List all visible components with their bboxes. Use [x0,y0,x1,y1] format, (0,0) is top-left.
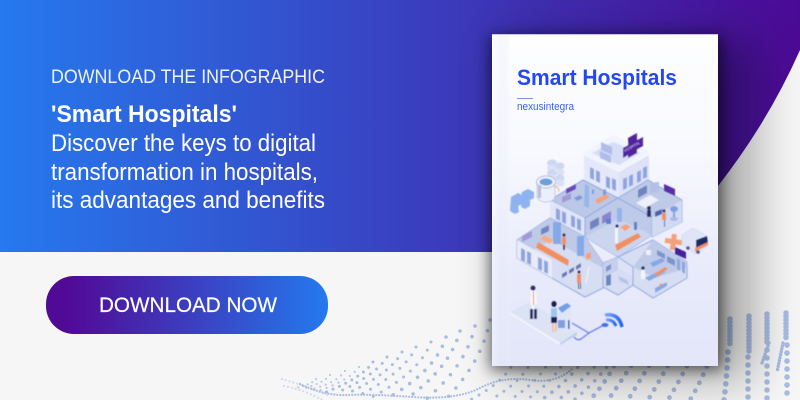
button: download now: DOWNLOAD NOW [99,294,277,317]
kiosk [558,303,571,333]
illustration: isometric smart hospital [510,133,708,345]
room: top right [618,180,682,237]
sign: dark purple board [675,247,686,259]
blue server units [510,189,534,214]
water tank [536,176,559,202]
data cylinders [547,160,564,186]
text block: description: 'Smart Hospitals' [51,101,237,128]
book cover [492,34,718,366]
rooftop floor [583,135,650,200]
room: small middle [603,257,633,295]
heading: download the infographic: DOWNLOAD THE INFOGRAPHIC [51,67,325,88]
platform [510,302,577,345]
icon: wifi signal [602,315,622,327]
dotted wave decoration [282,313,787,400]
patient at kiosk figure [551,301,557,332]
text block: description: transformation in hospitals, [51,159,318,186]
text block: description: Discover the keys to digital [51,130,316,157]
doctor figure [530,286,537,319]
hospital sign: purple cross [623,133,643,158]
dense wavy line [300,368,573,398]
room: lower right [618,240,687,298]
room: lobby [517,218,603,297]
text block: description: its advantages and benefits [51,187,325,214]
room: top left [550,180,618,238]
text block: description [51,101,325,214]
room: center [585,198,652,257]
book spine [492,35,512,366]
hospital sign: purple cross: HOSPITAL [624,141,641,153]
book title: Smart Hospitals [517,65,677,90]
logo: nexus integra: nexusintegra [517,101,575,113]
button: download now [46,276,328,334]
book shadow [490,36,755,380]
icon: orange cross [664,233,683,251]
network cable [572,323,604,340]
background gradient panel with curved corner [0,0,800,252]
ambulance [682,228,708,254]
